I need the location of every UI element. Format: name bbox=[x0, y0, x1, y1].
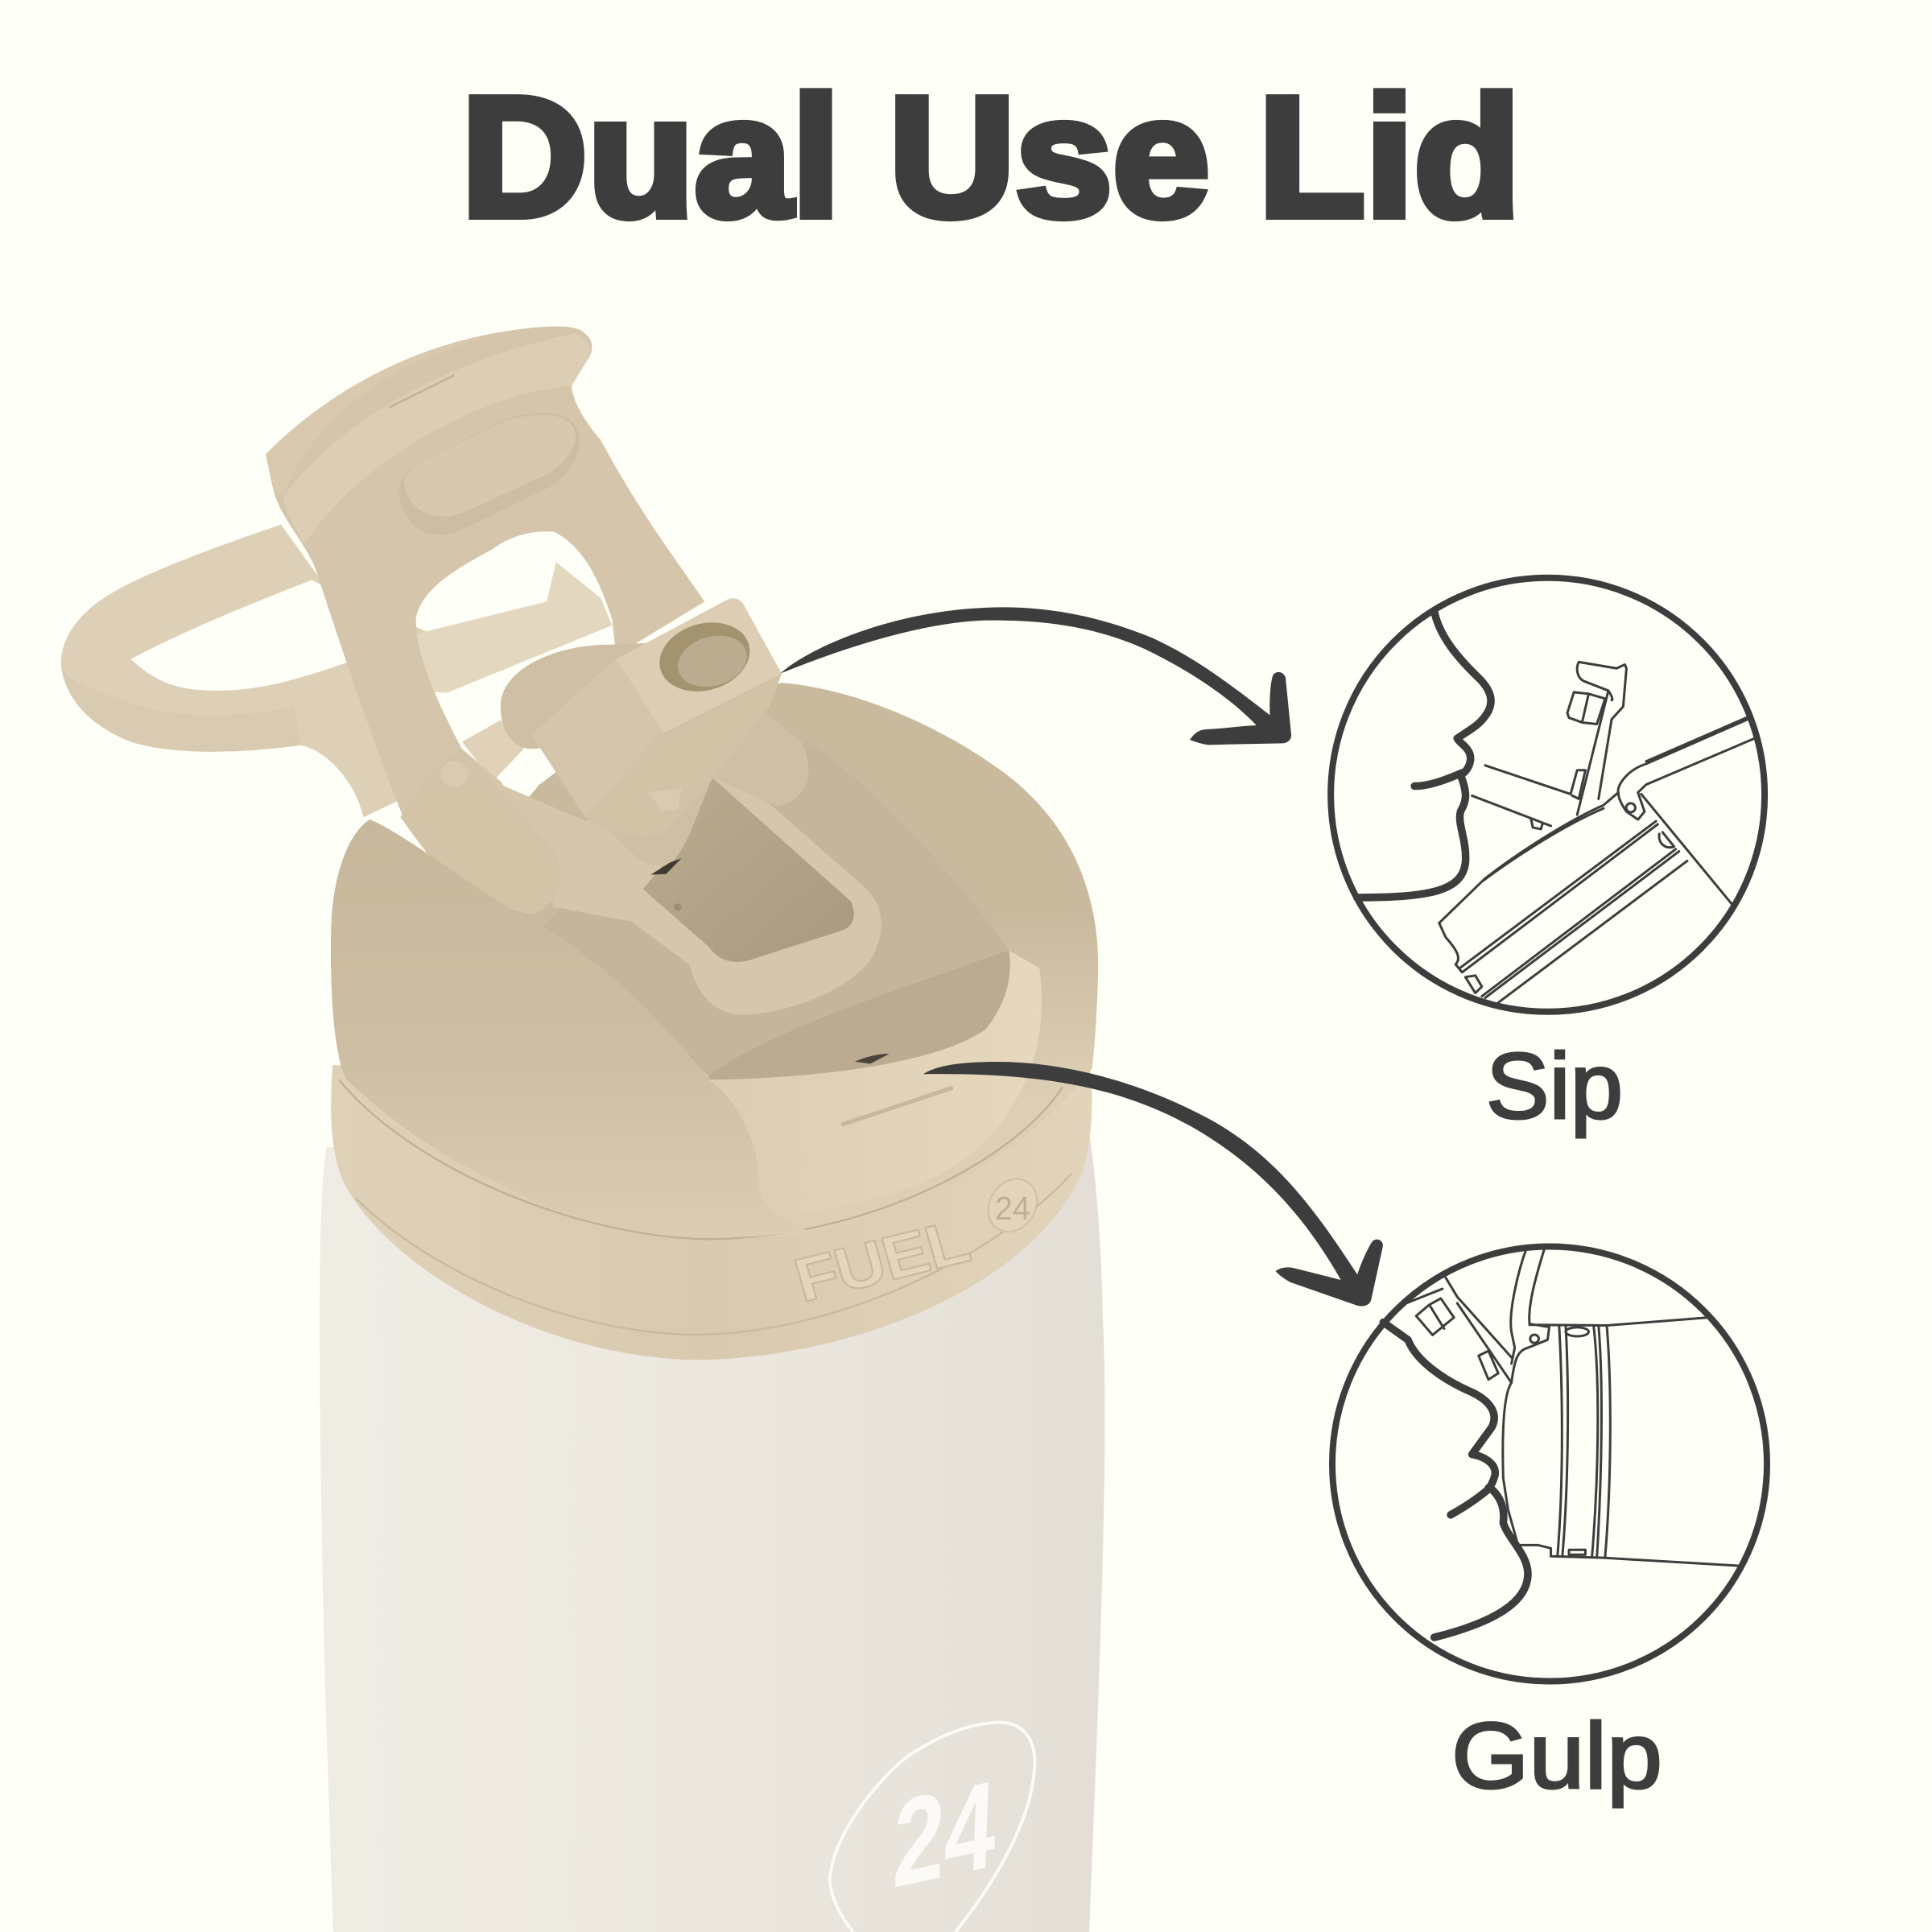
gulp label: Gulp bbox=[1451, 1703, 1662, 1808]
flap button bbox=[399, 413, 580, 535]
FUEL lid text: FUEL bbox=[787, 1206, 977, 1315]
small peg bbox=[647, 788, 682, 810]
bottle illustration bbox=[61, 327, 1104, 1932]
straw spout left face bbox=[531, 659, 663, 817]
straw spout top face bbox=[616, 598, 782, 733]
bottle logo bbox=[830, 1723, 1034, 1932]
left lid cover bbox=[331, 819, 808, 1237]
lid logo bbox=[980, 1171, 1046, 1239]
lid lower ring bbox=[331, 1065, 1092, 1360]
lid recess bbox=[539, 741, 1039, 1076]
lid silhouette bbox=[331, 683, 1098, 1238]
arrow to gulp bbox=[923, 1062, 1383, 1307]
vent dots bbox=[564, 903, 682, 963]
hinge arm base bbox=[400, 749, 559, 914]
sip icon circle bbox=[1331, 578, 1765, 1012]
hinge peg bbox=[440, 762, 469, 787]
lid top ring line bbox=[339, 1080, 1063, 1239]
drinking slot interior bbox=[643, 778, 854, 962]
straw base bbox=[501, 641, 808, 866]
gulp line art bbox=[1383, 1249, 1738, 1637]
sip icon bbox=[1331, 578, 1765, 1012]
sip label: Sip bbox=[1486, 1034, 1623, 1138]
carry loop handle bbox=[61, 525, 431, 817]
rear strap behind hinge bbox=[462, 720, 523, 782]
flap arm bbox=[266, 327, 704, 914]
gulp icon circle bbox=[1332, 1246, 1767, 1681]
straw spout right face bbox=[585, 674, 782, 836]
straw opening bbox=[649, 611, 760, 703]
sip line art bbox=[1357, 611, 1755, 1002]
gulp icon bbox=[1332, 1246, 1767, 1681]
bottle body bbox=[320, 1127, 1104, 1932]
arrow to sip bbox=[780, 607, 1291, 745]
drinking slot frame bbox=[493, 770, 881, 1015]
lid and flip straw, drawn in zoom coordinates bbox=[61, 327, 1098, 1360]
title: Dual Use Lid bbox=[461, 61, 1521, 252]
front drinking tab bbox=[708, 950, 1042, 1213]
lid logo: 24 bbox=[995, 1191, 1030, 1228]
bottle logo: 24 bbox=[891, 1754, 998, 1914]
handle crossbars behind window bbox=[416, 562, 612, 693]
